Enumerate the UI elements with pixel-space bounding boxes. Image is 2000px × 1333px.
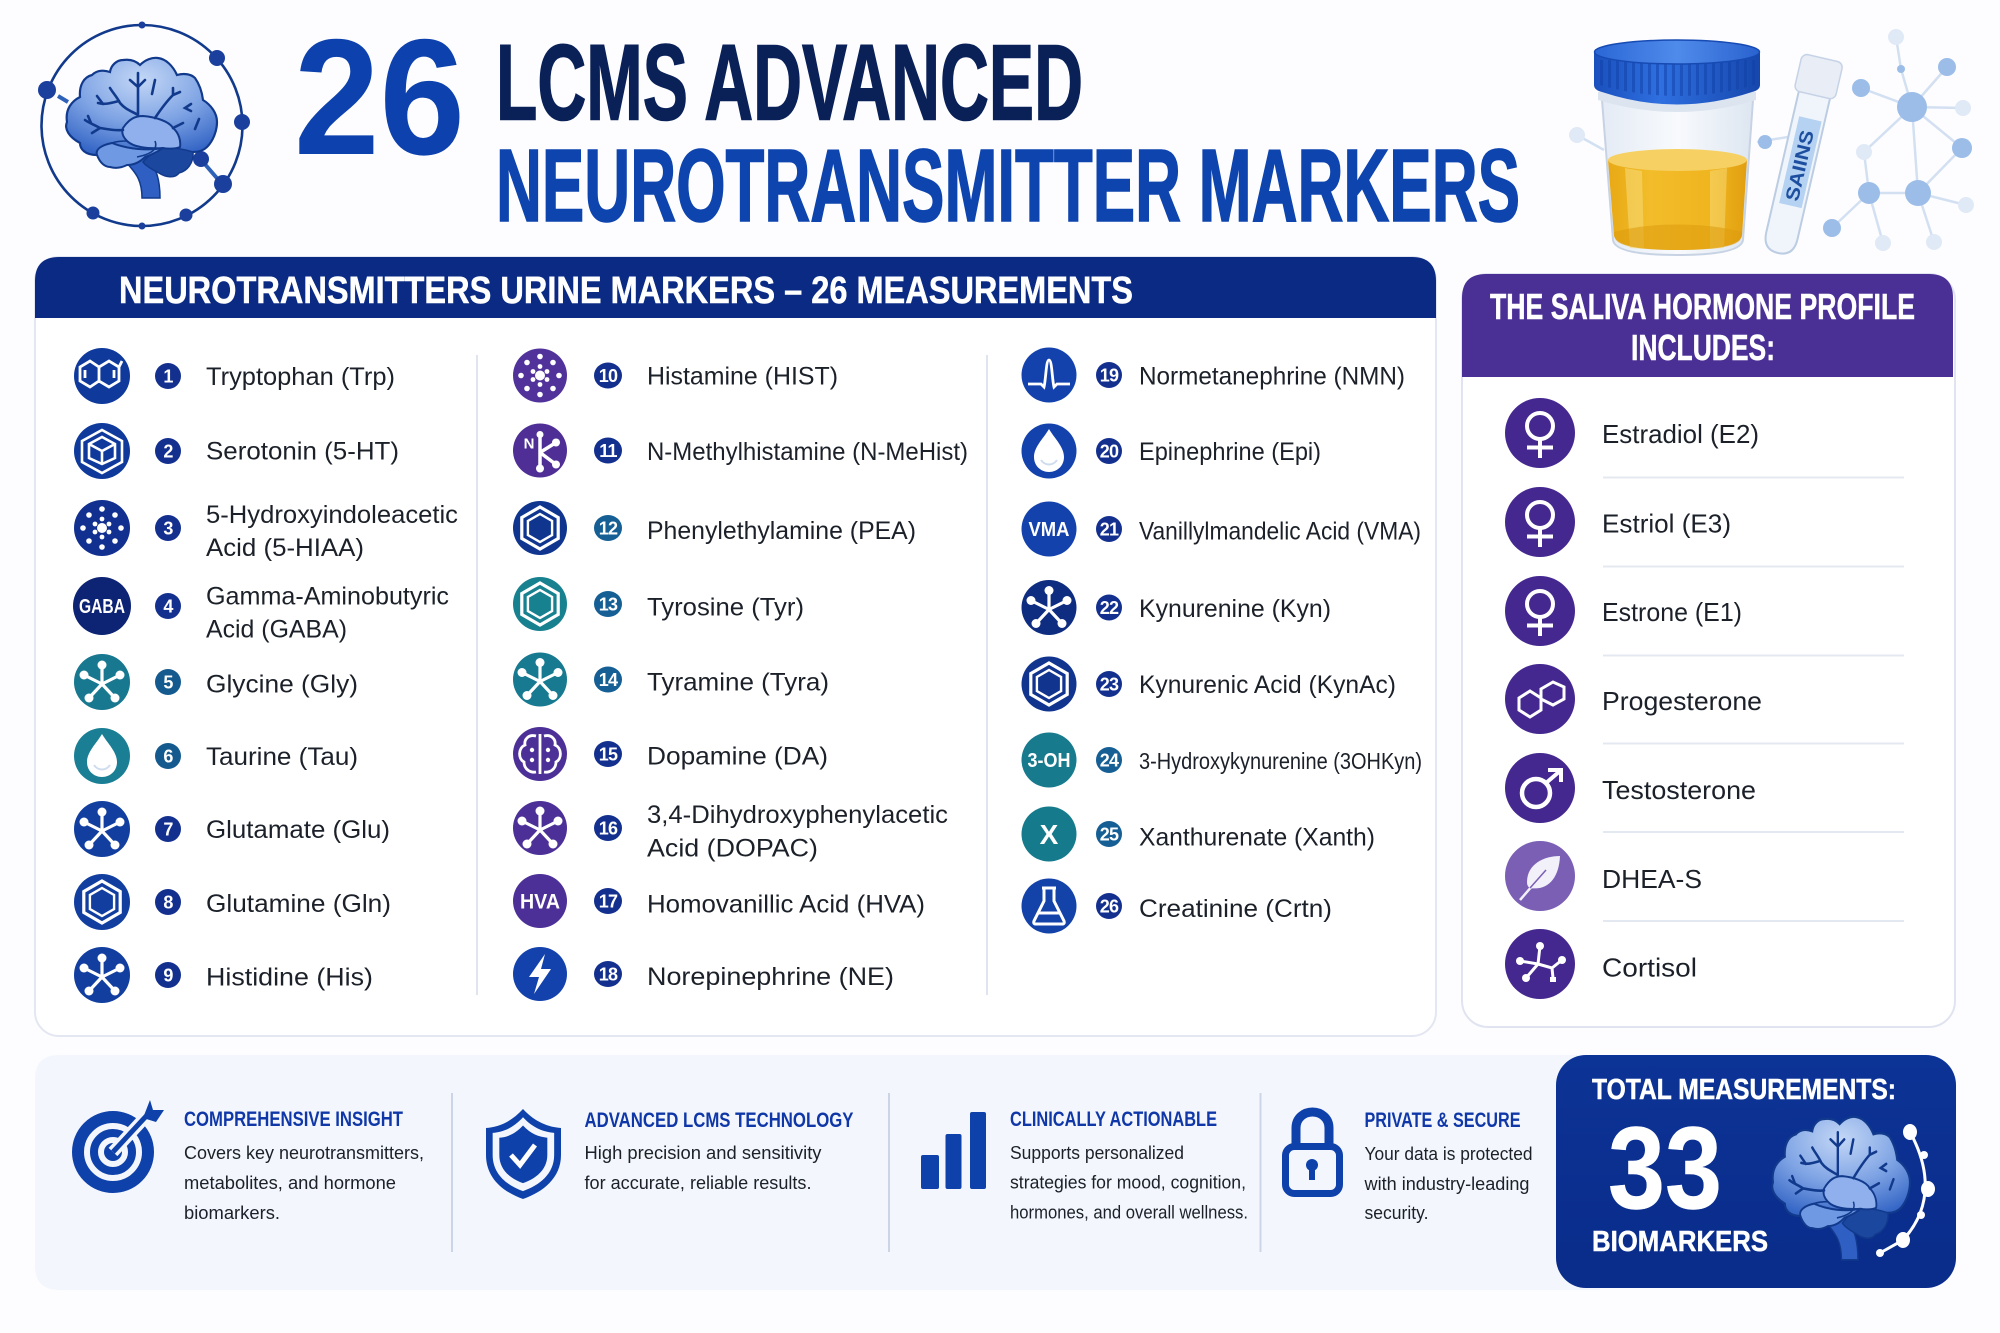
marker name: Normetanephrine (NMN) xyxy=(1139,362,1405,390)
callout label: BIOMARKERS xyxy=(1592,1226,1768,1258)
icon: hexagon xyxy=(74,874,130,930)
row 18 xyxy=(513,947,894,1001)
icon: padlock xyxy=(1286,1112,1340,1194)
marker name: 5-Hydroxyindoleacetic xyxy=(206,501,458,529)
icon: molecule xyxy=(74,801,130,857)
number badge xyxy=(155,515,181,541)
number badge xyxy=(594,961,622,987)
row 10 xyxy=(513,348,838,402)
icon: hexagon xyxy=(513,501,567,555)
feature text xyxy=(184,1142,424,1223)
hormone: estradiol: Estradiol (E2) xyxy=(1602,419,1759,449)
row 8 xyxy=(74,874,391,930)
number badge xyxy=(1096,362,1122,388)
row 4 xyxy=(73,577,449,644)
number badge xyxy=(155,889,181,915)
icon: molecule xyxy=(74,654,130,710)
icon: venus xyxy=(1505,398,1575,468)
icon: hexagon xyxy=(1022,656,1076,712)
icon: brain with node arc xyxy=(1772,1117,1935,1260)
row 26 xyxy=(1022,878,1332,934)
icon: dot burst xyxy=(513,348,567,402)
hormone: estrone xyxy=(1505,576,1742,646)
hormone: testosterone xyxy=(1505,753,1756,823)
hormone: cortisol xyxy=(1505,929,1697,999)
number badge: 18 xyxy=(599,964,618,984)
marker name: Homovanillic Acid (HVA) xyxy=(647,890,925,918)
panel: neurotransmitters urine markers xyxy=(35,257,1436,1036)
marker name: Dopamine (DA) xyxy=(647,742,828,770)
feature text: strategies for mood, cognition, xyxy=(1010,1172,1246,1192)
icon: bar chart xyxy=(921,1112,986,1189)
panel heading: NEUROTRANSMITTERS URINE MARKERS – 26 MEASUREMENTS xyxy=(119,270,1133,312)
feature heading: COMPREHENSIVE INSIGHT xyxy=(184,1108,403,1131)
icon: X: X xyxy=(1040,819,1059,850)
icon: HVA: HVA xyxy=(520,890,560,914)
number badge xyxy=(155,962,181,988)
icon: N molecule: N xyxy=(524,436,534,452)
marker name: Vanillylmandelic Acid (VMA) xyxy=(1139,517,1421,545)
icon: venus xyxy=(1505,487,1575,557)
number badge: 12 xyxy=(599,518,618,538)
panel: saliva hormone profile xyxy=(1462,274,1955,1027)
number badge xyxy=(1096,821,1122,847)
feature text: biomarkers. xyxy=(184,1202,280,1223)
icon: leaf xyxy=(1505,841,1575,911)
marker name: Norepinephrine (NE) xyxy=(647,963,894,991)
number badge: 23 xyxy=(1100,674,1119,694)
marker name: Tyramine (Tyra) xyxy=(647,668,829,696)
icon: lightning bolt xyxy=(513,947,567,1001)
marker name: Acid (GABA) xyxy=(206,616,347,644)
icon: peak trace xyxy=(1022,348,1076,402)
icon: fused rings xyxy=(74,348,130,404)
icon: venus xyxy=(1505,576,1575,646)
row 21 xyxy=(1022,502,1421,556)
big number 26: 26 xyxy=(294,5,465,189)
number badge xyxy=(1096,893,1122,919)
icon: molecule xyxy=(74,947,130,1003)
row 9 xyxy=(74,947,373,1003)
number badge: 11 xyxy=(599,441,617,461)
number badge: 13 xyxy=(599,594,618,614)
number badge: 25 xyxy=(1100,824,1119,844)
number badge: 24 xyxy=(1100,750,1119,770)
row 12 xyxy=(513,501,916,555)
icon: HVA xyxy=(513,874,567,928)
marker name xyxy=(206,582,449,644)
panel heading: INCLUDES: xyxy=(1631,327,1775,368)
panel header xyxy=(1462,274,1953,377)
row 1 xyxy=(74,348,395,404)
marker name xyxy=(206,501,458,562)
row 2 xyxy=(74,423,399,479)
feature text: Your data is protected xyxy=(1364,1143,1532,1164)
marker name: Acid (DOPAC) xyxy=(647,834,818,862)
marker name: Kynurenine (Kyn) xyxy=(1139,595,1331,623)
icon: molecule xyxy=(1022,580,1076,635)
marker name: 3,4-Dihydroxyphenylacetic xyxy=(647,801,948,829)
panel header xyxy=(35,257,1436,318)
row 25 xyxy=(1022,806,1375,862)
marker name: Glutamine (Gln) xyxy=(206,890,391,918)
icon: branched molecule xyxy=(1505,929,1575,999)
icon: mars xyxy=(1505,753,1575,823)
row 7 xyxy=(74,801,390,857)
marker name xyxy=(647,801,948,862)
feature text: High precision and sensitivity xyxy=(584,1142,822,1163)
icon: cube hexagon xyxy=(74,423,130,479)
marker name: Glycine (Gly) xyxy=(206,670,358,698)
marker name: 3-Hydroxykynurenine (3OHKyn) xyxy=(1139,748,1422,774)
number badge xyxy=(594,591,622,617)
hormone: estrone: Estrone (E1) xyxy=(1602,597,1742,627)
number badge xyxy=(155,438,181,464)
number badge xyxy=(594,741,622,767)
feature: advanced LCMS technology xyxy=(486,1109,854,1199)
feature text: with industry-leading xyxy=(1364,1173,1530,1194)
row 20 xyxy=(1022,424,1321,478)
number badge xyxy=(594,362,622,388)
hormone: progesterone: Progesterone xyxy=(1602,686,1762,716)
illustration: saliva test tube xyxy=(1757,53,1843,258)
number badge: 26 xyxy=(1100,896,1119,916)
marker name: Creatinine (Crtn) xyxy=(1139,895,1332,923)
number badge: 8 xyxy=(163,892,173,912)
hormone: cortisol: Cortisol xyxy=(1602,952,1697,982)
hormone: testosterone: Testosterone xyxy=(1602,775,1756,805)
number badge: 20 xyxy=(1100,442,1119,462)
number badge: 2 xyxy=(163,442,173,462)
feature heading: CLINICALLY ACTIONABLE xyxy=(1010,1108,1217,1131)
marker name: N-Methylhistamine (N-MeHist) xyxy=(647,438,968,466)
number badge: 14 xyxy=(599,670,618,690)
icon: flask xyxy=(1022,878,1076,934)
number badge: 19 xyxy=(1100,366,1119,386)
hormone: DHEA-S xyxy=(1505,841,1702,911)
feature text: Supports personalized xyxy=(1010,1142,1184,1163)
number badge: 6 xyxy=(163,746,173,766)
panel: feature strip xyxy=(35,1055,1600,1290)
hormone: estriol: Estriol (E3) xyxy=(1602,508,1731,538)
marker name: Histidine (His) xyxy=(206,964,373,992)
row 6 xyxy=(74,728,358,784)
number badge xyxy=(155,363,181,389)
icon: hexagon xyxy=(513,577,567,631)
icon: molecule xyxy=(513,801,567,855)
marker name: Phenylethylamine (PEA) xyxy=(647,517,916,545)
callout: total measurements xyxy=(1556,1055,1956,1288)
icon: dot burst xyxy=(74,500,130,556)
number badge: 16 xyxy=(599,818,618,838)
number badge xyxy=(155,743,181,769)
marker name: Glutamate (Glu) xyxy=(206,816,390,844)
row 13 xyxy=(513,577,804,631)
marker name: Acid (5-HIAA) xyxy=(206,534,364,562)
number badge: 9 xyxy=(163,966,173,986)
row 15 xyxy=(513,727,828,781)
number badge: 22 xyxy=(1100,598,1119,618)
row 16 xyxy=(513,801,948,862)
callout heading: TOTAL MEASUREMENTS: xyxy=(1592,1074,1896,1106)
feature text xyxy=(584,1142,822,1193)
feature text: security. xyxy=(1364,1202,1428,1223)
number badge xyxy=(594,888,622,914)
icon: 3-OH: 3-OH xyxy=(1028,750,1070,772)
number badge xyxy=(155,669,181,695)
feature heading: ADVANCED LCMS TECHNOLOGY xyxy=(584,1109,854,1132)
illustration: saliva test tube: SAIINS xyxy=(1782,128,1819,203)
feature text: hormones, and overall wellness. xyxy=(1010,1202,1248,1222)
feature: comprehensive insight xyxy=(78,1100,424,1223)
row 24 xyxy=(1022,732,1422,788)
feature heading: PRIVATE & SECURE xyxy=(1364,1109,1520,1132)
icon: VMA: VMA xyxy=(1028,519,1070,541)
panel heading xyxy=(1490,286,1915,368)
icon: target with arrow xyxy=(78,1100,164,1187)
marker name: Epinephrine (Epi) xyxy=(1139,438,1321,466)
row 23 xyxy=(1022,656,1396,712)
number badge xyxy=(1096,671,1122,697)
row 14 xyxy=(513,652,829,706)
row 5 xyxy=(74,654,358,710)
icon: drop xyxy=(74,728,130,784)
marker name: Taurine (Tau) xyxy=(206,743,358,771)
title xyxy=(294,5,1520,243)
marker name: Xanthurenate (Xanth) xyxy=(1139,824,1375,852)
row 19 xyxy=(1022,348,1405,402)
number badge xyxy=(594,438,622,464)
row 11 xyxy=(513,424,968,478)
icon: X xyxy=(1022,806,1076,862)
number badge: 4 xyxy=(163,596,173,616)
number badge xyxy=(155,816,181,842)
hormone: estriol xyxy=(1505,487,1731,557)
feature text xyxy=(1010,1142,1248,1222)
number badge: 5 xyxy=(163,672,173,692)
icon: drop xyxy=(1022,424,1076,478)
marker name: Kynurenic Acid (KynAc) xyxy=(1139,671,1396,699)
icon: molecule xyxy=(513,652,567,706)
number badge xyxy=(594,815,622,841)
number badge xyxy=(1096,516,1122,542)
feature text: for accurate, reliable results. xyxy=(584,1172,812,1193)
icon: shield with check xyxy=(486,1109,561,1199)
row 3 xyxy=(74,500,458,562)
icon: fused rings xyxy=(1505,664,1575,734)
icon: VMA xyxy=(1022,502,1076,556)
marker name: Gamma-Aminobutyric xyxy=(206,582,449,610)
hormone: progesterone xyxy=(1505,664,1762,734)
number badge: 17 xyxy=(599,892,618,912)
row 17 xyxy=(513,874,925,928)
number badge: 1 xyxy=(163,366,173,386)
feature: clinically actionable xyxy=(921,1108,1248,1222)
icon: brain outline xyxy=(513,727,567,781)
number badge: 3 xyxy=(163,518,173,538)
title line 1: LCMS ADVANCED xyxy=(496,22,1083,142)
hormone: estradiol xyxy=(1505,398,1759,468)
illustration: urine specimen cup xyxy=(1594,40,1760,255)
illustration: molecule network xyxy=(1569,29,1974,251)
icon: GABA: GABA xyxy=(79,596,125,618)
number badge xyxy=(1096,594,1122,620)
number badge: 21 xyxy=(1100,520,1119,540)
marker name: Tryptophan (Trp) xyxy=(206,363,395,391)
feature text: Covers key neurotransmitters, xyxy=(184,1142,424,1163)
hormone: DHEA-S: DHEA-S xyxy=(1602,864,1702,894)
feature text xyxy=(1364,1143,1532,1223)
marker name: Tyrosine (Tyr) xyxy=(647,594,804,622)
feature text: metabolites, and hormone xyxy=(184,1172,396,1193)
number badge xyxy=(594,666,622,692)
icon: N molecule xyxy=(513,424,567,478)
marker name: Serotonin (5-HT) xyxy=(206,438,399,466)
callout number: 33 xyxy=(1608,1102,1722,1233)
number badge xyxy=(1096,438,1122,464)
number badge xyxy=(594,515,622,541)
number badge xyxy=(1096,747,1122,773)
feature: private and secure xyxy=(1286,1109,1532,1223)
icon: GABA xyxy=(73,577,131,635)
number badge: 10 xyxy=(599,366,618,386)
number badge xyxy=(155,593,181,619)
icon: brain in orbit ring xyxy=(38,22,250,230)
number badge: 7 xyxy=(163,820,173,840)
marker name: Histamine (HIST) xyxy=(647,362,838,390)
row 22 xyxy=(1022,580,1331,635)
number badge: 15 xyxy=(599,744,618,764)
icon: 3-OH xyxy=(1022,732,1076,788)
